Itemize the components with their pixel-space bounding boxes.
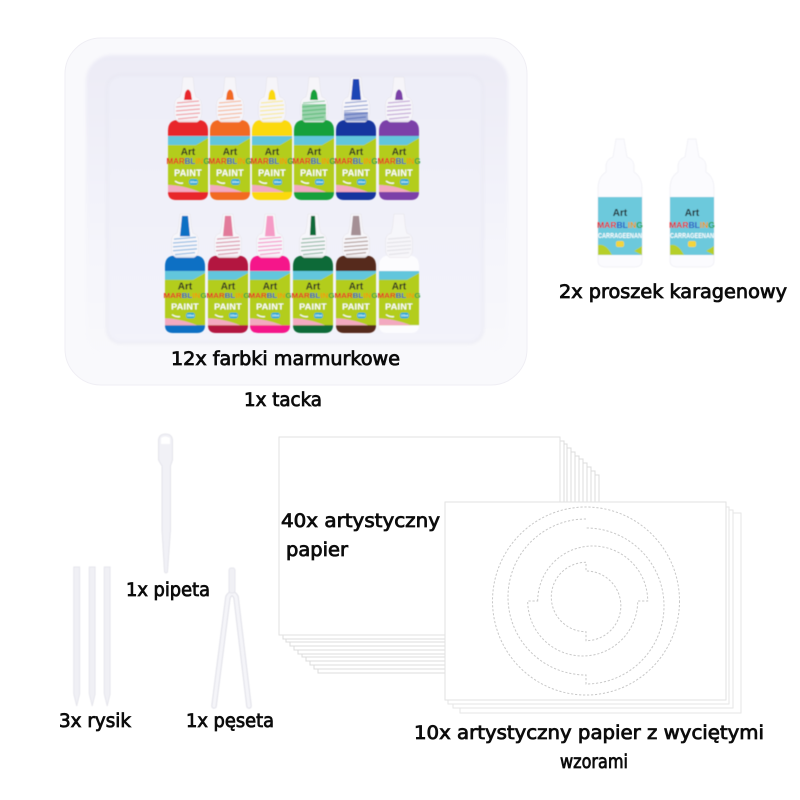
bottle: purple: 100ml (401, 180, 408, 184)
bottle: carrageenan 2: Art (685, 208, 700, 219)
bottle: brown: 100ml (358, 314, 365, 317)
bottle: white: PAINT (385, 302, 413, 312)
bottle: dark green: Art (306, 282, 321, 292)
bottle: crimson (206, 214, 250, 333)
bottle: white: 100ml (401, 314, 408, 317)
bottle: red: Art (181, 147, 196, 158)
bottle: carrageenan 1 (597, 139, 643, 267)
label: carrageenan: 2x proszek karagenowy (559, 282, 787, 303)
bottle: orange: 100ml (232, 180, 239, 184)
bottle: sky blue: 100ml (187, 314, 194, 317)
bottle: dark green (291, 214, 335, 333)
label: tweezers: 1x pęseta (186, 711, 274, 732)
bottle: yellow: MARBLING (250, 157, 294, 166)
bottle: crimson: MARBLING (206, 291, 250, 300)
label: styluses: 3x rysik (59, 711, 131, 732)
bottle: orange (208, 77, 252, 200)
bottle: purple: PAINT (385, 168, 413, 178)
bottle: yellow: Art (265, 147, 280, 158)
label: 10x paper: 10x artystyczny papier z wyciętymi (414, 723, 764, 744)
bottle: sky blue: Art (178, 282, 193, 292)
tray ridge (86, 55, 508, 360)
tray (65, 38, 527, 385)
cut-out circle pattern (492, 507, 680, 695)
bottle: dark green: PAINT (299, 302, 327, 312)
bottle: red (166, 77, 210, 200)
paper stack: 40x (279, 437, 599, 673)
paper stack: 10x with cut-out patterns (445, 502, 741, 713)
bottle: brown: MARBLING (334, 291, 378, 300)
bottle: red: 100ml (190, 180, 197, 184)
bottle: navy blue (334, 77, 378, 200)
tray floor (107, 75, 483, 343)
bottle: navy blue: 100ml (358, 180, 365, 184)
bottle: pink: MARBLING (248, 291, 292, 300)
paint bottles (163, 77, 421, 333)
bottle: green: MARBLING (292, 157, 336, 166)
icon: three styluses (74, 567, 110, 706)
bottle: red: MARBLING (166, 157, 210, 166)
bottle: carrageenan 1: CARRAGEENAN (598, 231, 642, 240)
bottle: sky blue: MARBLING (163, 291, 207, 300)
label: paints: 12x farbki marmurkowe (171, 349, 400, 370)
carrageenan bottles (597, 139, 715, 267)
bottle: dark green: 100ml (315, 314, 322, 317)
bottle: yellow: 100ml (274, 180, 281, 184)
icon: pipette (158, 434, 172, 573)
label: tray: 1x tacka (244, 390, 322, 411)
label: 10x paper: wzorami (560, 752, 628, 773)
bottle: crimson: PAINT (214, 302, 242, 312)
bottle: carrageenan 2: CARRAGEENAN (670, 231, 714, 240)
bottle: navy blue: PAINT (342, 168, 370, 178)
bottle: carrageenan 1: Art (613, 208, 628, 219)
bottle: red: PAINT (174, 168, 202, 178)
label: pipette: 1x pipeta (126, 580, 210, 601)
label: 40x paper: papier (286, 540, 348, 561)
bottle: yellow (250, 77, 294, 200)
bottle: purple (377, 77, 421, 200)
bottle: carrageenan 1: MARBLING (597, 220, 643, 230)
bottle: crimson: Art (221, 282, 236, 292)
bottle: green: 100ml (316, 180, 323, 184)
bottle: crimson: 100ml (230, 314, 237, 317)
bottle: carrageenan 2: MARBLING (669, 220, 715, 230)
bottle: brown: PAINT (342, 302, 370, 312)
bottle: dark green: MARBLING (291, 291, 335, 300)
bottle: white: Art (392, 282, 407, 292)
bottle: brown: Art (349, 282, 364, 292)
bottle: yellow: PAINT (258, 168, 286, 178)
bottle: green (292, 77, 336, 200)
bottle: carrageenan 2 (669, 139, 715, 267)
bottle: white (377, 214, 421, 333)
bottle: white: MARBLING (377, 291, 421, 300)
bottle: pink: PAINT (256, 302, 284, 312)
bottle: green: Art (307, 147, 322, 158)
label: 10x paper (414, 723, 764, 773)
bottle: navy blue: Art (349, 147, 364, 158)
bottle: orange: Art (223, 147, 238, 158)
bottle: orange: MARBLING (208, 157, 252, 166)
bottle: purple: Art (392, 147, 407, 158)
bottle: pink (248, 214, 292, 333)
icon: tweezers (214, 568, 249, 706)
tray outer rim (65, 38, 527, 385)
label: 40x paper (281, 511, 440, 561)
label: 40x paper: 40x artystyczny (281, 511, 440, 532)
bottle: orange: PAINT (216, 168, 244, 178)
bottle: sky blue (163, 214, 207, 333)
bottle: pink: Art (263, 282, 278, 292)
bottle: green: PAINT (300, 168, 328, 178)
bottle: brown (334, 214, 378, 333)
bottle: pink: 100ml (272, 314, 279, 317)
bottle: navy blue: MARBLING (334, 157, 378, 166)
bottle: sky blue: PAINT (171, 302, 199, 312)
bottle: purple: MARBLING (377, 157, 421, 166)
